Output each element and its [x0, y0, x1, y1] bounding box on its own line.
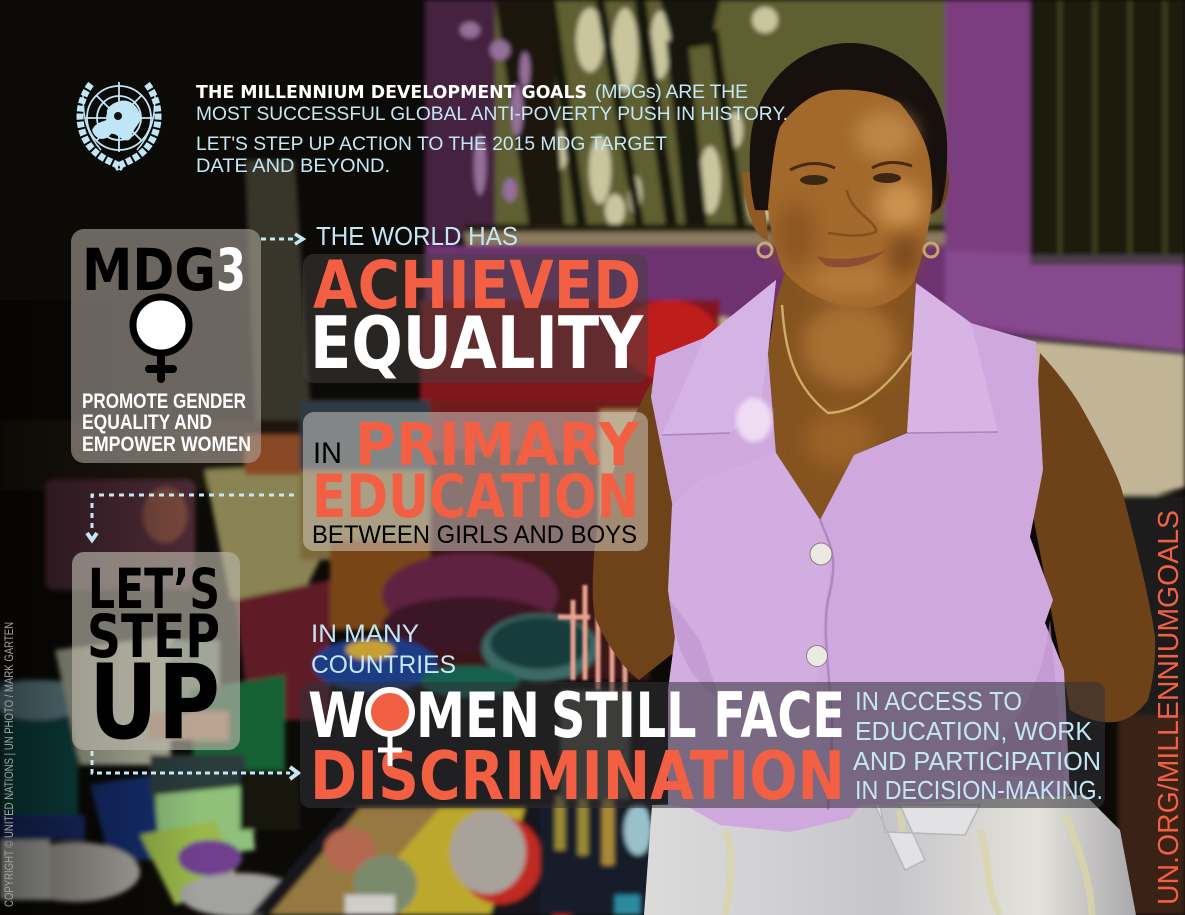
panel: let's step up: STEP — [87, 602, 220, 672]
panel: women still face discrimination: STILL FACE — [551, 679, 845, 752]
nose — [828, 190, 876, 236]
mouth — [816, 250, 886, 267]
panel: achieved equality — [303, 247, 648, 385]
lower maroon and orange tubs — [235, 580, 330, 720]
heading: the world has: THE WORLD HAS — [316, 221, 518, 251]
panel: let's step up — [72, 552, 240, 763]
right window — [1030, 0, 1185, 262]
necklace — [782, 305, 912, 413]
skirt — [644, 795, 1136, 915]
panel: MDG3 goal: EMPOWER WOMEN — [82, 433, 251, 456]
purple wall band — [425, 245, 1185, 320]
intro text: DATE AND BEYOND. — [196, 155, 390, 177]
arrow: education to let's step up — [87, 495, 294, 540]
panel: primary education: PRIMARY — [355, 410, 640, 479]
panel: women still face discrimination: IN ACCESS TO — [855, 686, 1022, 716]
UN emblem — [80, 82, 158, 168]
intro text: LET'S STEP UP ACTION TO THE 2015 MDG TARGET — [196, 133, 667, 155]
panel: MDG3 goal: 3 — [216, 236, 246, 304]
lower centre — [250, 805, 560, 915]
window with trees — [465, 0, 950, 240]
panel: MDG3 goal — [71, 229, 261, 463]
intro text: MOST SUCCESSFUL GLOBAL ANTI-POVERTY PUSH IN HISTORY. — [196, 103, 788, 125]
website url: UN.ORG/MILLENNIUMGOALS — [1153, 510, 1185, 905]
cream wall — [1000, 338, 1185, 505]
buttons — [810, 543, 832, 565]
basins — [382, 553, 558, 637]
intro text: THE MILLENNIUM DEVELOPMENT GOALS — [196, 82, 587, 103]
soft dark fade on left edge — [0, 300, 200, 915]
ears — [742, 172, 768, 240]
earrings — [758, 243, 772, 257]
face — [768, 90, 932, 308]
hair — [750, 43, 947, 215]
text: in many countries — [311, 620, 456, 679]
collar — [662, 280, 776, 435]
panel: women still face discrimination: MEN — [416, 679, 540, 752]
arrow: let's step up to discrimination — [92, 751, 298, 779]
dark trellis and purple frame — [495, 0, 565, 235]
panel: primary education: EDUCATION — [312, 462, 639, 532]
panel: MDG3 goal: PROMOTE GENDER — [82, 390, 246, 413]
panel: MDG3 goal: EQUALITY AND — [82, 411, 212, 434]
neck and chest — [768, 270, 916, 520]
skirt tie — [875, 805, 980, 870]
text: in many countries: IN MANY — [311, 620, 419, 648]
trunk — [245, 160, 312, 430]
photo subject: smiling woman in lilac blouse — [593, 43, 1155, 915]
left cups and buckets — [0, 680, 78, 815]
text: in many countries: COUNTRIES — [311, 651, 456, 679]
panel: let's step up: LET’S — [88, 557, 220, 621]
arrow: MDG3 to headline — [261, 234, 303, 244]
intro text — [196, 81, 788, 177]
panel: women still face discrimination: AND PARTICIPATION — [853, 746, 1101, 776]
icon: female symbol — [133, 297, 189, 379]
panel: let's step up: UP — [89, 643, 220, 763]
red basin — [420, 300, 720, 430]
panel: MDG3 goal: MDG — [82, 236, 216, 304]
window ledge — [465, 224, 955, 232]
panel: primary education: IN — [313, 437, 342, 470]
wreath — [80, 84, 158, 168]
upper left tubs — [0, 420, 300, 490]
panel: achieved equality: ACHIEVED — [313, 247, 641, 324]
intro text: (MDGs) ARE THE — [595, 81, 748, 103]
panel: achieved equality: EQUALITY — [310, 301, 644, 385]
panel: women still face discrimination — [300, 679, 1105, 815]
panel: women still face discrimination: DISCRIMINATION — [310, 737, 845, 815]
panel: primary education — [303, 410, 648, 551]
pink rack — [558, 585, 625, 700]
panel: women still face discrimination: W — [308, 679, 366, 752]
icon: female symbol as letter O — [368, 690, 412, 766]
arms — [593, 383, 690, 680]
eyes — [790, 162, 912, 170]
panel: women still face discrimination: IN DECISION-MAKING. — [855, 775, 1103, 805]
blouse — [651, 280, 1070, 832]
copyright credit: COPYRIGHT © UNITED NATIONS | UN PHOTO / MARK GARTEN — [4, 622, 16, 907]
panel: primary education: BETWEEN GIRLS AND BOYS — [312, 521, 637, 549]
panel: women still face discrimination: EDUCATION, WORK — [855, 716, 1093, 746]
